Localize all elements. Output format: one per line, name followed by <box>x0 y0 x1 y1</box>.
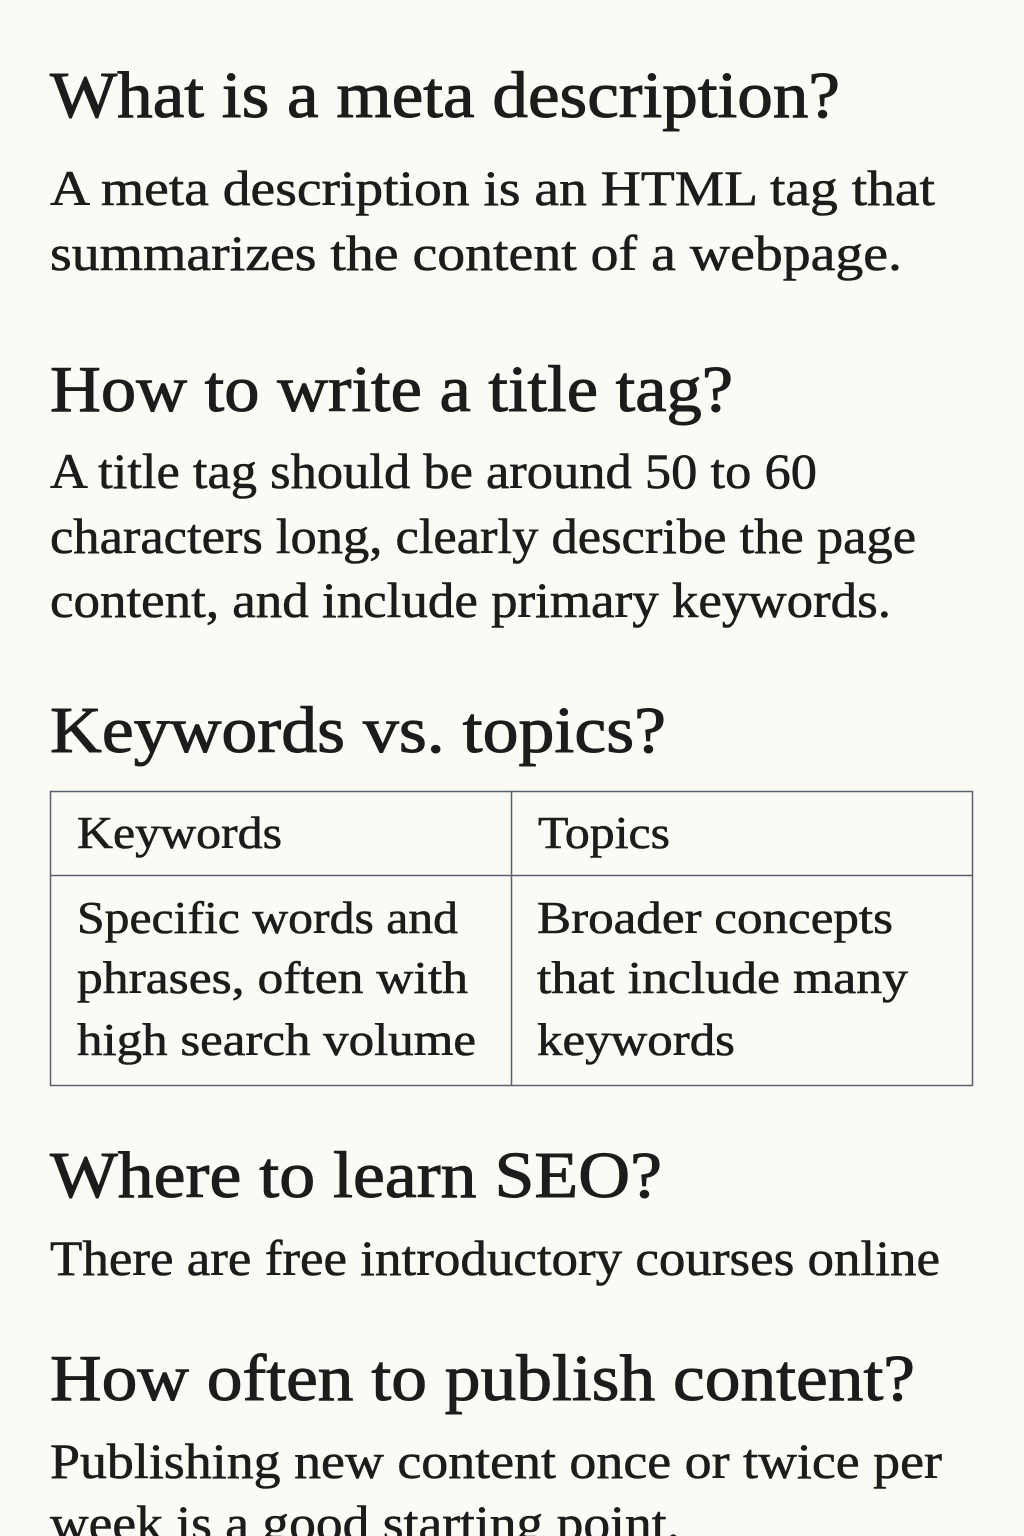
text block: meta description answer <box>50 160 935 281</box>
text block: publish frequency answer <box>50 1433 942 1536</box>
table cell: topics definition: that include many <box>537 952 908 1003</box>
text block: title tag answer: content, and include primary keywords. <box>50 572 891 628</box>
table cell: topics definition: Broader concepts <box>537 892 893 943</box>
table cell: keywords definition: Specific words and <box>77 892 458 943</box>
text block: title tag answer: characters long, clearly describe the page <box>50 508 916 564</box>
heading: title tag: How to write a title tag? <box>50 353 733 426</box>
text block: meta description answer: A meta description is an HTML tag that <box>50 160 935 216</box>
table cell: keywords definition <box>77 892 476 1065</box>
heading: keywords vs topics: Keywords vs. topics? <box>50 694 666 767</box>
text block: title tag answer <box>50 443 916 628</box>
heading: publish frequency: How often to publish content? <box>50 1342 915 1415</box>
text block: title tag answer: A title tag should be around 50 to 60 <box>50 443 817 499</box>
text block: meta description answer: summarizes the content of a webpage. <box>50 225 902 281</box>
text block: publish frequency answer: Publishing new content once or twice per <box>50 1433 942 1489</box>
table cell: keywords definition: high search volume <box>77 1014 476 1065</box>
heading: learn SEO: Where to learn SEO? <box>50 1139 662 1212</box>
table cell: topics definition: keywords <box>537 1014 735 1065</box>
text block: learn SEO answer: There are free introductory courses online <box>50 1230 940 1286</box>
table header: Topics: Topics <box>538 807 670 858</box>
table header: Keywords: Keywords <box>77 807 282 858</box>
table cell: keywords definition: phrases, often with <box>77 952 468 1003</box>
table: keywords vs topics <box>50 791 973 1086</box>
heading: meta description: What is a meta description? <box>50 59 840 132</box>
table cell: topics definition <box>537 892 908 1065</box>
